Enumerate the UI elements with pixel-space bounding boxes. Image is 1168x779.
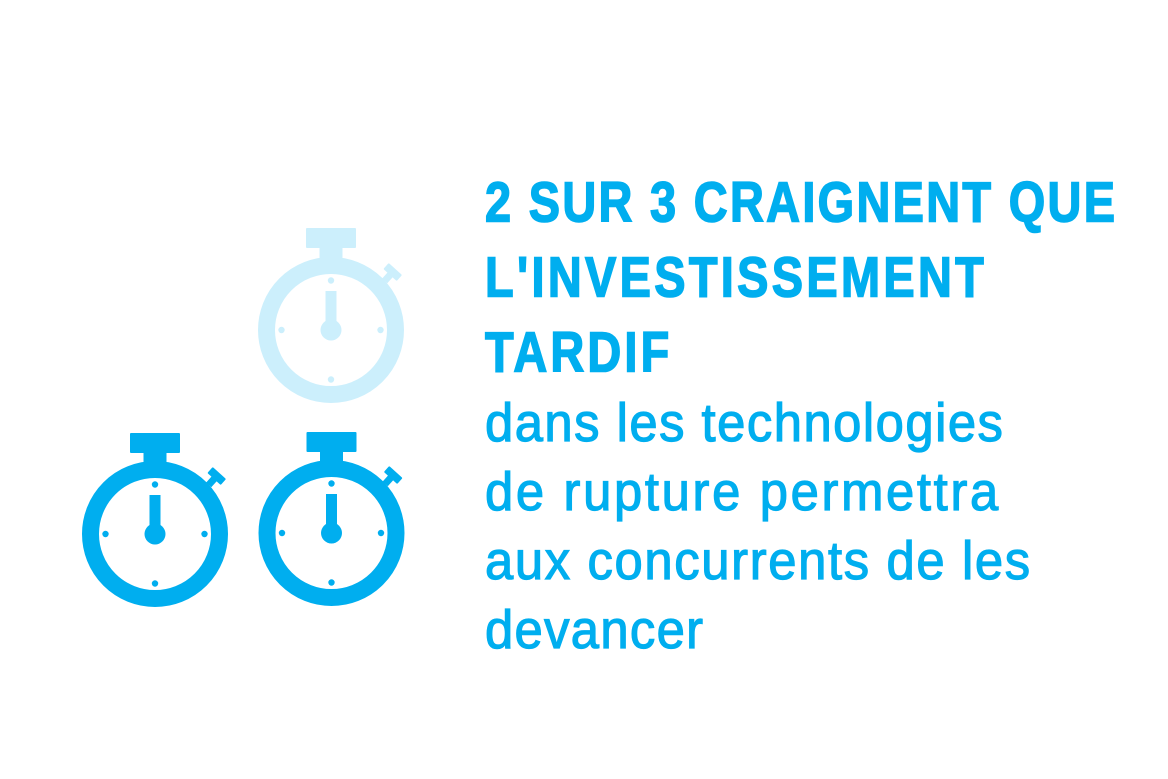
body text: devancer <box>485 601 703 660</box>
heading: 2 SUR 3 CRAIGNENT QUE <box>485 171 1115 234</box>
icon: stopwatch light top <box>266 228 402 394</box>
icon: stopwatch bottom right <box>267 432 403 598</box>
body text: dans les technologies <box>485 394 1003 453</box>
body text: de rupture permettra <box>485 463 999 522</box>
heading: L'INVESTISSEMENT <box>485 246 984 309</box>
body text <box>485 394 1030 660</box>
heading <box>485 171 1115 384</box>
heading: TARDIF <box>485 321 669 384</box>
body text: aux concurrents de les <box>485 532 1030 591</box>
icon: stopwatch bottom left <box>90 433 226 598</box>
